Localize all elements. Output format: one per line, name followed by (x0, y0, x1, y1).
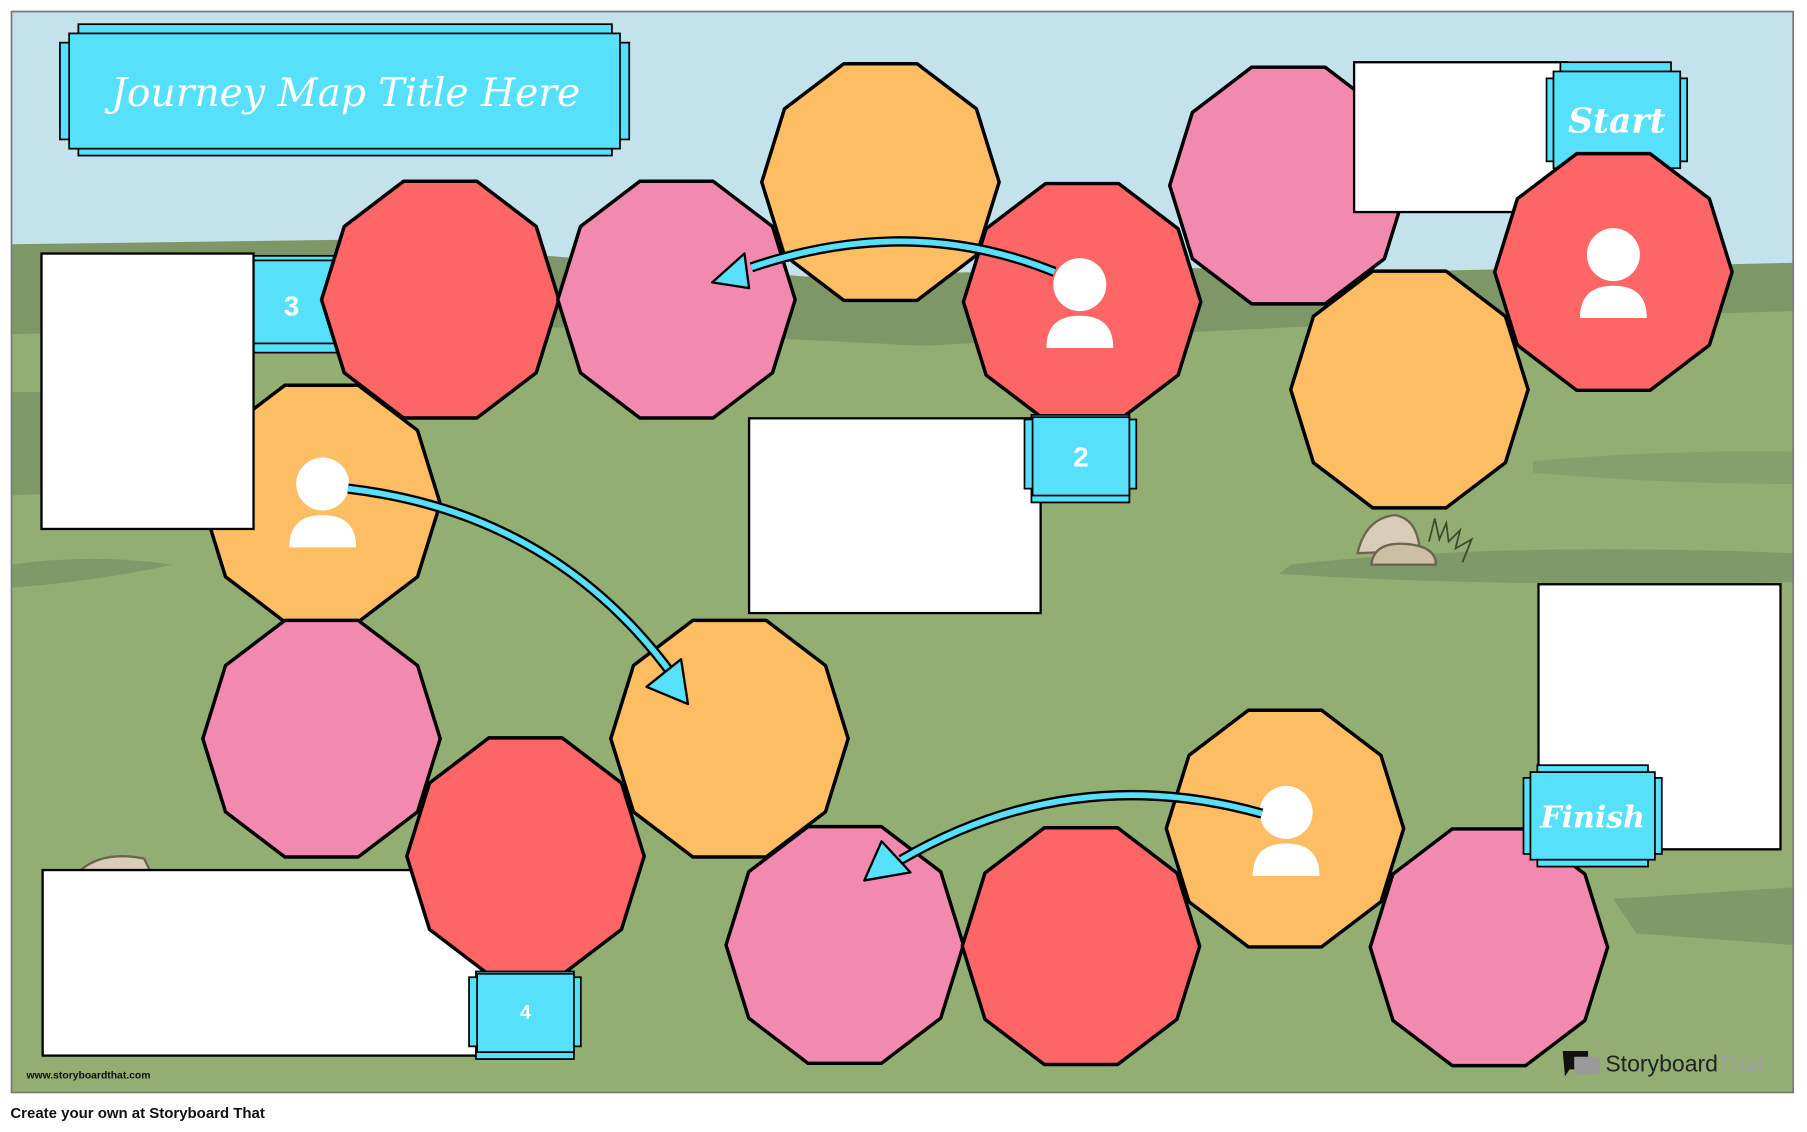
decagon 6 orange (1291, 271, 1528, 508)
tab 3 (233, 256, 338, 353)
text box: bottom left (43, 870, 484, 1056)
tab 4 (469, 971, 581, 1059)
Start tab: Start (1568, 102, 1666, 142)
decagon 10 red (407, 738, 644, 975)
decagon 9 pink (203, 620, 440, 857)
watermark logo: StoryboardThat (1605, 1051, 1765, 1077)
decagon 12 pink (726, 827, 963, 1063)
Start tab (1547, 62, 1687, 177)
title banner: Journey Map Title Here (104, 71, 580, 116)
decagon 8 orange with person (203, 385, 440, 622)
arrow: 2 to 3 (712, 241, 1054, 288)
website url: www.storyboardthat.com (26, 1071, 150, 1082)
decagon 2 pink (558, 181, 795, 418)
text box: left (41, 254, 254, 529)
decagon 13 red (962, 828, 1200, 1064)
decagon 4 red with person (963, 184, 1201, 420)
decagon 14 orange with person (1166, 710, 1404, 947)
title banner (60, 24, 629, 156)
tab 2: 2 (1073, 442, 1089, 473)
text box: center (749, 418, 1041, 613)
arrow: 3 to 4 (348, 489, 688, 704)
text box: top right (1354, 62, 1567, 212)
decagon 1 red (322, 181, 559, 418)
tab 2 (1025, 415, 1136, 502)
Finish tab (1524, 765, 1662, 867)
text box: right (1538, 584, 1780, 849)
decagon 15 pink (1370, 829, 1608, 1066)
decagon 3 orange (762, 64, 999, 300)
decagon 5 pink (1170, 67, 1407, 304)
arrow: 4 to finish (864, 795, 1262, 880)
tab 3: 3 (284, 291, 299, 322)
Finish tab: Finish (1539, 800, 1645, 835)
footer caption: Create your own at Storyboard That (10, 1105, 265, 1122)
tab 4: 4 (520, 1002, 531, 1024)
decagon 7 red with person (1495, 154, 1732, 390)
decagon 11 orange (611, 620, 848, 857)
